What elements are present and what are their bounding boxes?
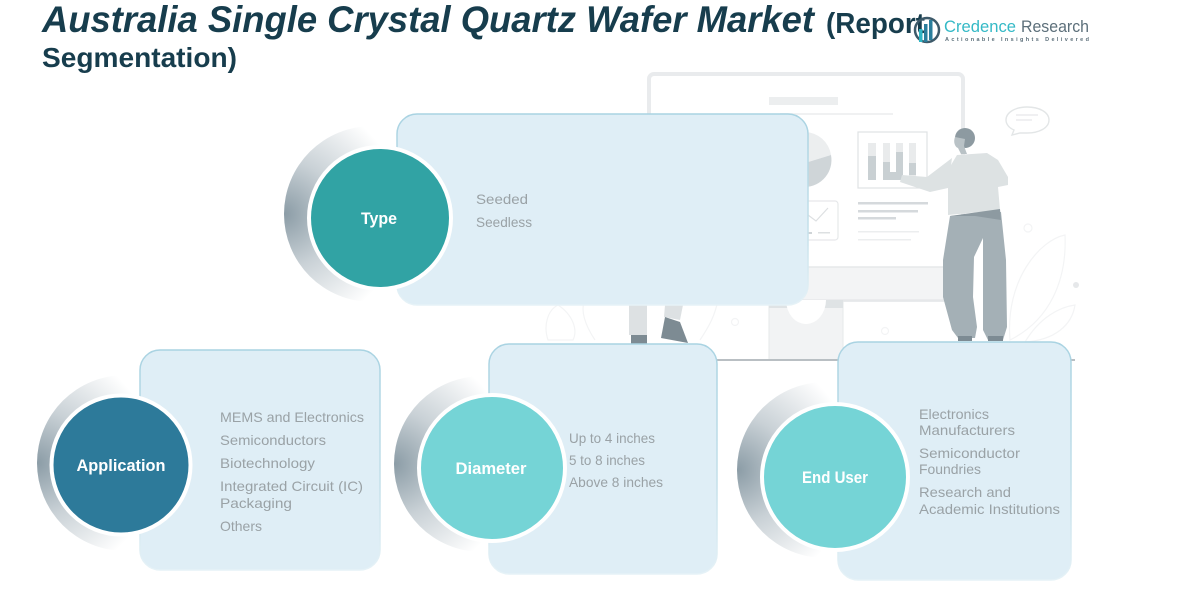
title: Segmentation) [42, 42, 237, 73]
bar chart card [858, 132, 927, 188]
person right [900, 128, 1008, 341]
card [489, 344, 717, 574]
background illustration: presenter at monitor [546, 74, 1079, 361]
list: 5 to 8 inches [569, 452, 645, 468]
badge [762, 404, 908, 550]
list: Seedless [476, 214, 532, 230]
logo: Credence Research: Actionable Insights Delivered [945, 37, 1089, 43]
badge [52, 396, 190, 534]
speech bubble [1006, 107, 1049, 135]
panel: end user [737, 342, 1071, 580]
list [220, 409, 364, 534]
icon: logo bars [915, 18, 939, 42]
list: Others [220, 518, 262, 534]
list [569, 430, 663, 490]
list: Integrated Circuit (IC) [220, 478, 363, 494]
pie chart [805, 132, 831, 187]
list: Up to 4 inches [569, 430, 655, 446]
list: Academic Institutions [919, 501, 1060, 517]
panel: type [284, 114, 808, 305]
badge [419, 395, 565, 541]
list: Above 8 inches [569, 474, 663, 490]
logo: Credence Research: Credence [944, 17, 1016, 36]
leaves [546, 224, 1075, 342]
title: Australia Single Crystal Quartz Wafer Market [41, 0, 816, 40]
panel: application [37, 350, 380, 570]
list [476, 191, 532, 230]
list [919, 406, 1060, 517]
heading: Application [76, 456, 166, 475]
monitor [649, 74, 1075, 361]
small check card [800, 201, 838, 240]
crescent [37, 375, 213, 551]
heading: End User [802, 468, 868, 487]
card [397, 114, 808, 305]
crescent [394, 376, 570, 552]
card [140, 350, 380, 570]
list: Semiconductor [919, 445, 1020, 461]
logo: Credence Research: Research [1021, 17, 1089, 36]
person left legs [629, 305, 688, 344]
list: Semiconductors [220, 432, 326, 448]
title: (Report [826, 8, 925, 40]
logo: Credence Research [915, 17, 1089, 43]
crescent [737, 382, 913, 558]
badge [309, 147, 451, 289]
card [838, 342, 1071, 580]
heading: Type [361, 209, 397, 228]
list: Electronics [919, 406, 989, 422]
list: Foundries [919, 461, 981, 477]
list: Manufacturers [919, 422, 1015, 438]
crescent [284, 126, 460, 302]
heading: Diameter [456, 459, 527, 478]
list: Seeded [476, 191, 528, 207]
list: MEMS and Electronics [220, 409, 364, 425]
title [41, 0, 925, 73]
list: Packaging [220, 495, 292, 511]
list: Research and [919, 484, 1011, 500]
panel: diameter [394, 344, 717, 574]
list: Biotechnology [220, 455, 315, 471]
text lines on screen [858, 202, 928, 240]
